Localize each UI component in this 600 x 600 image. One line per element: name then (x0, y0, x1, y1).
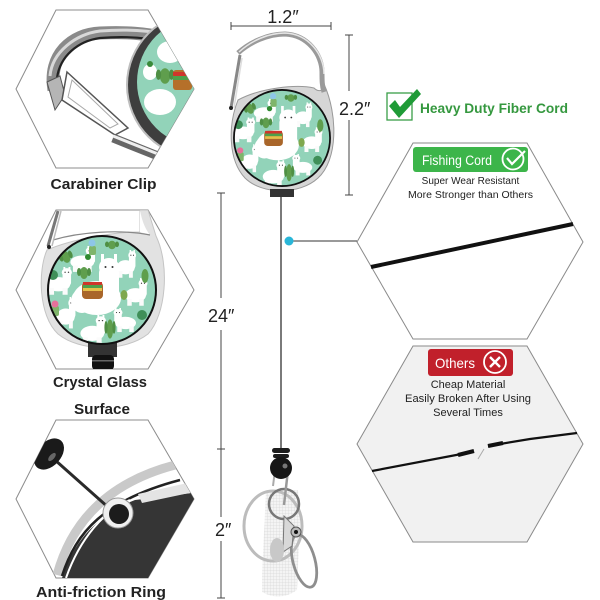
llama badge (46, 236, 156, 345)
heading: heavy duty fiber cord: Heavy Duty Fiber Cord (420, 100, 568, 116)
panel: anti-friction ring hexagon (16, 420, 200, 578)
panel: fishing cord hexagon (357, 143, 583, 339)
broken cord (372, 433, 577, 471)
cord outlet (270, 189, 294, 197)
text: others description: Easily Broken After Using (405, 393, 531, 405)
badge: fishing cord: Fishing Cord (422, 153, 492, 168)
panel: crystal glass hexagon (16, 210, 194, 370)
heading: surface label: Surface (74, 402, 130, 418)
text: others description (405, 379, 531, 419)
heading: carabiner clip label: Carabiner Clip (50, 177, 157, 193)
text: others description: Cheap Material (431, 379, 505, 391)
retractable cord (280, 196, 282, 450)
heading: crystal glass label: Crystal Glass (53, 375, 147, 391)
dimension: cord length 24 inch: 24″ (208, 306, 235, 326)
dimension: height 2.2 inch: 2.2″ (339, 99, 371, 119)
product: retractable badge reel (229, 33, 334, 197)
panel: others hexagon (357, 346, 583, 542)
dimension: 2 inch: 2″ (215, 520, 232, 540)
dimension: width 1.2 inch (231, 7, 331, 30)
badge: others: Others (435, 355, 475, 371)
badge: fishing cord (413, 147, 528, 172)
llama badge on reel (233, 90, 330, 187)
panel: carabiner clip hexagon (16, 10, 194, 168)
strong black cord (371, 224, 573, 267)
dimension: width 1.2 inch: 1.2″ (267, 7, 299, 27)
dimension: cord length 24 inch (208, 193, 235, 449)
dimension: 2 inch (215, 449, 232, 598)
product: key ring attachment (244, 448, 322, 597)
icon: green checkbox (387, 89, 421, 120)
text: fishing cord description: More Stronger than Others (408, 190, 533, 201)
text: fishing cord description (408, 176, 533, 201)
callout: pointer from cord to fishing cord panel (284, 236, 357, 246)
text: fishing cord description: Super Wear Resistant (422, 176, 520, 187)
text: others description: Several Times (433, 407, 503, 419)
dimension: height 2.2 inch (339, 35, 371, 195)
badge: others (428, 349, 513, 376)
